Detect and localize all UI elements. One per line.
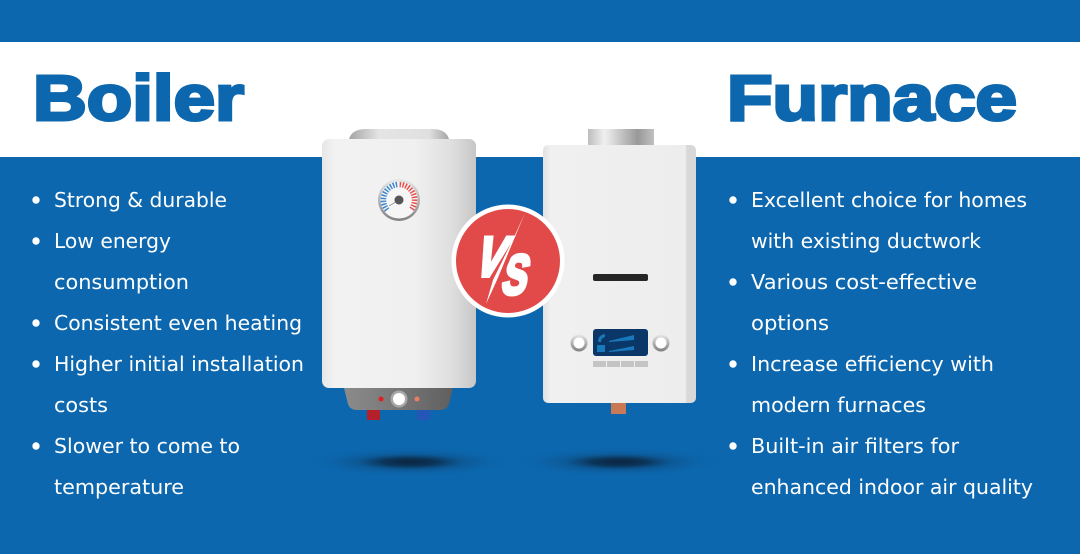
list: boiler points: consumption	[54, 270, 189, 294]
list: boiler points: Strong & durable	[54, 188, 227, 212]
list: furnace points: Excellent choice for homes	[751, 188, 1027, 212]
heading: Boiler: Boiler	[33, 62, 244, 134]
list: boiler points: Slower to come to	[54, 434, 240, 458]
list: boiler points: Higher initial installation	[54, 352, 304, 376]
shadow: boiler	[305, 447, 515, 477]
list: furnace points: options	[751, 311, 829, 335]
list: furnace points: Increase efficiency with	[751, 352, 994, 376]
shadow: furnace	[514, 447, 724, 477]
list: boiler points: Low energy	[54, 229, 171, 253]
display panel	[593, 329, 648, 356]
icon: temperature gauge	[378, 179, 420, 221]
badge: VS	[452, 204, 564, 318]
illustration: boiler tank	[322, 129, 476, 420]
list: furnace points	[729, 188, 1033, 499]
badge: VS: V	[468, 226, 517, 289]
list: boiler points: Consistent even heating	[54, 311, 302, 335]
list: boiler points	[32, 188, 304, 499]
list: boiler points: temperature	[54, 475, 184, 499]
badge: VS: S	[497, 244, 536, 306]
list: furnace points: with existing ductwork	[751, 229, 981, 253]
heading: Furnace: Furnace	[727, 62, 1017, 134]
list: furnace points: Built-in air filters for	[751, 434, 960, 458]
list: boiler points: costs	[54, 393, 108, 417]
list: furnace points: enhanced indoor air quality	[751, 475, 1033, 499]
white header band	[0, 42, 1080, 157]
list: furnace points: modern furnaces	[751, 393, 926, 417]
list: furnace points: Various cost-effective	[751, 270, 977, 294]
illustration: furnace unit	[543, 129, 696, 414]
